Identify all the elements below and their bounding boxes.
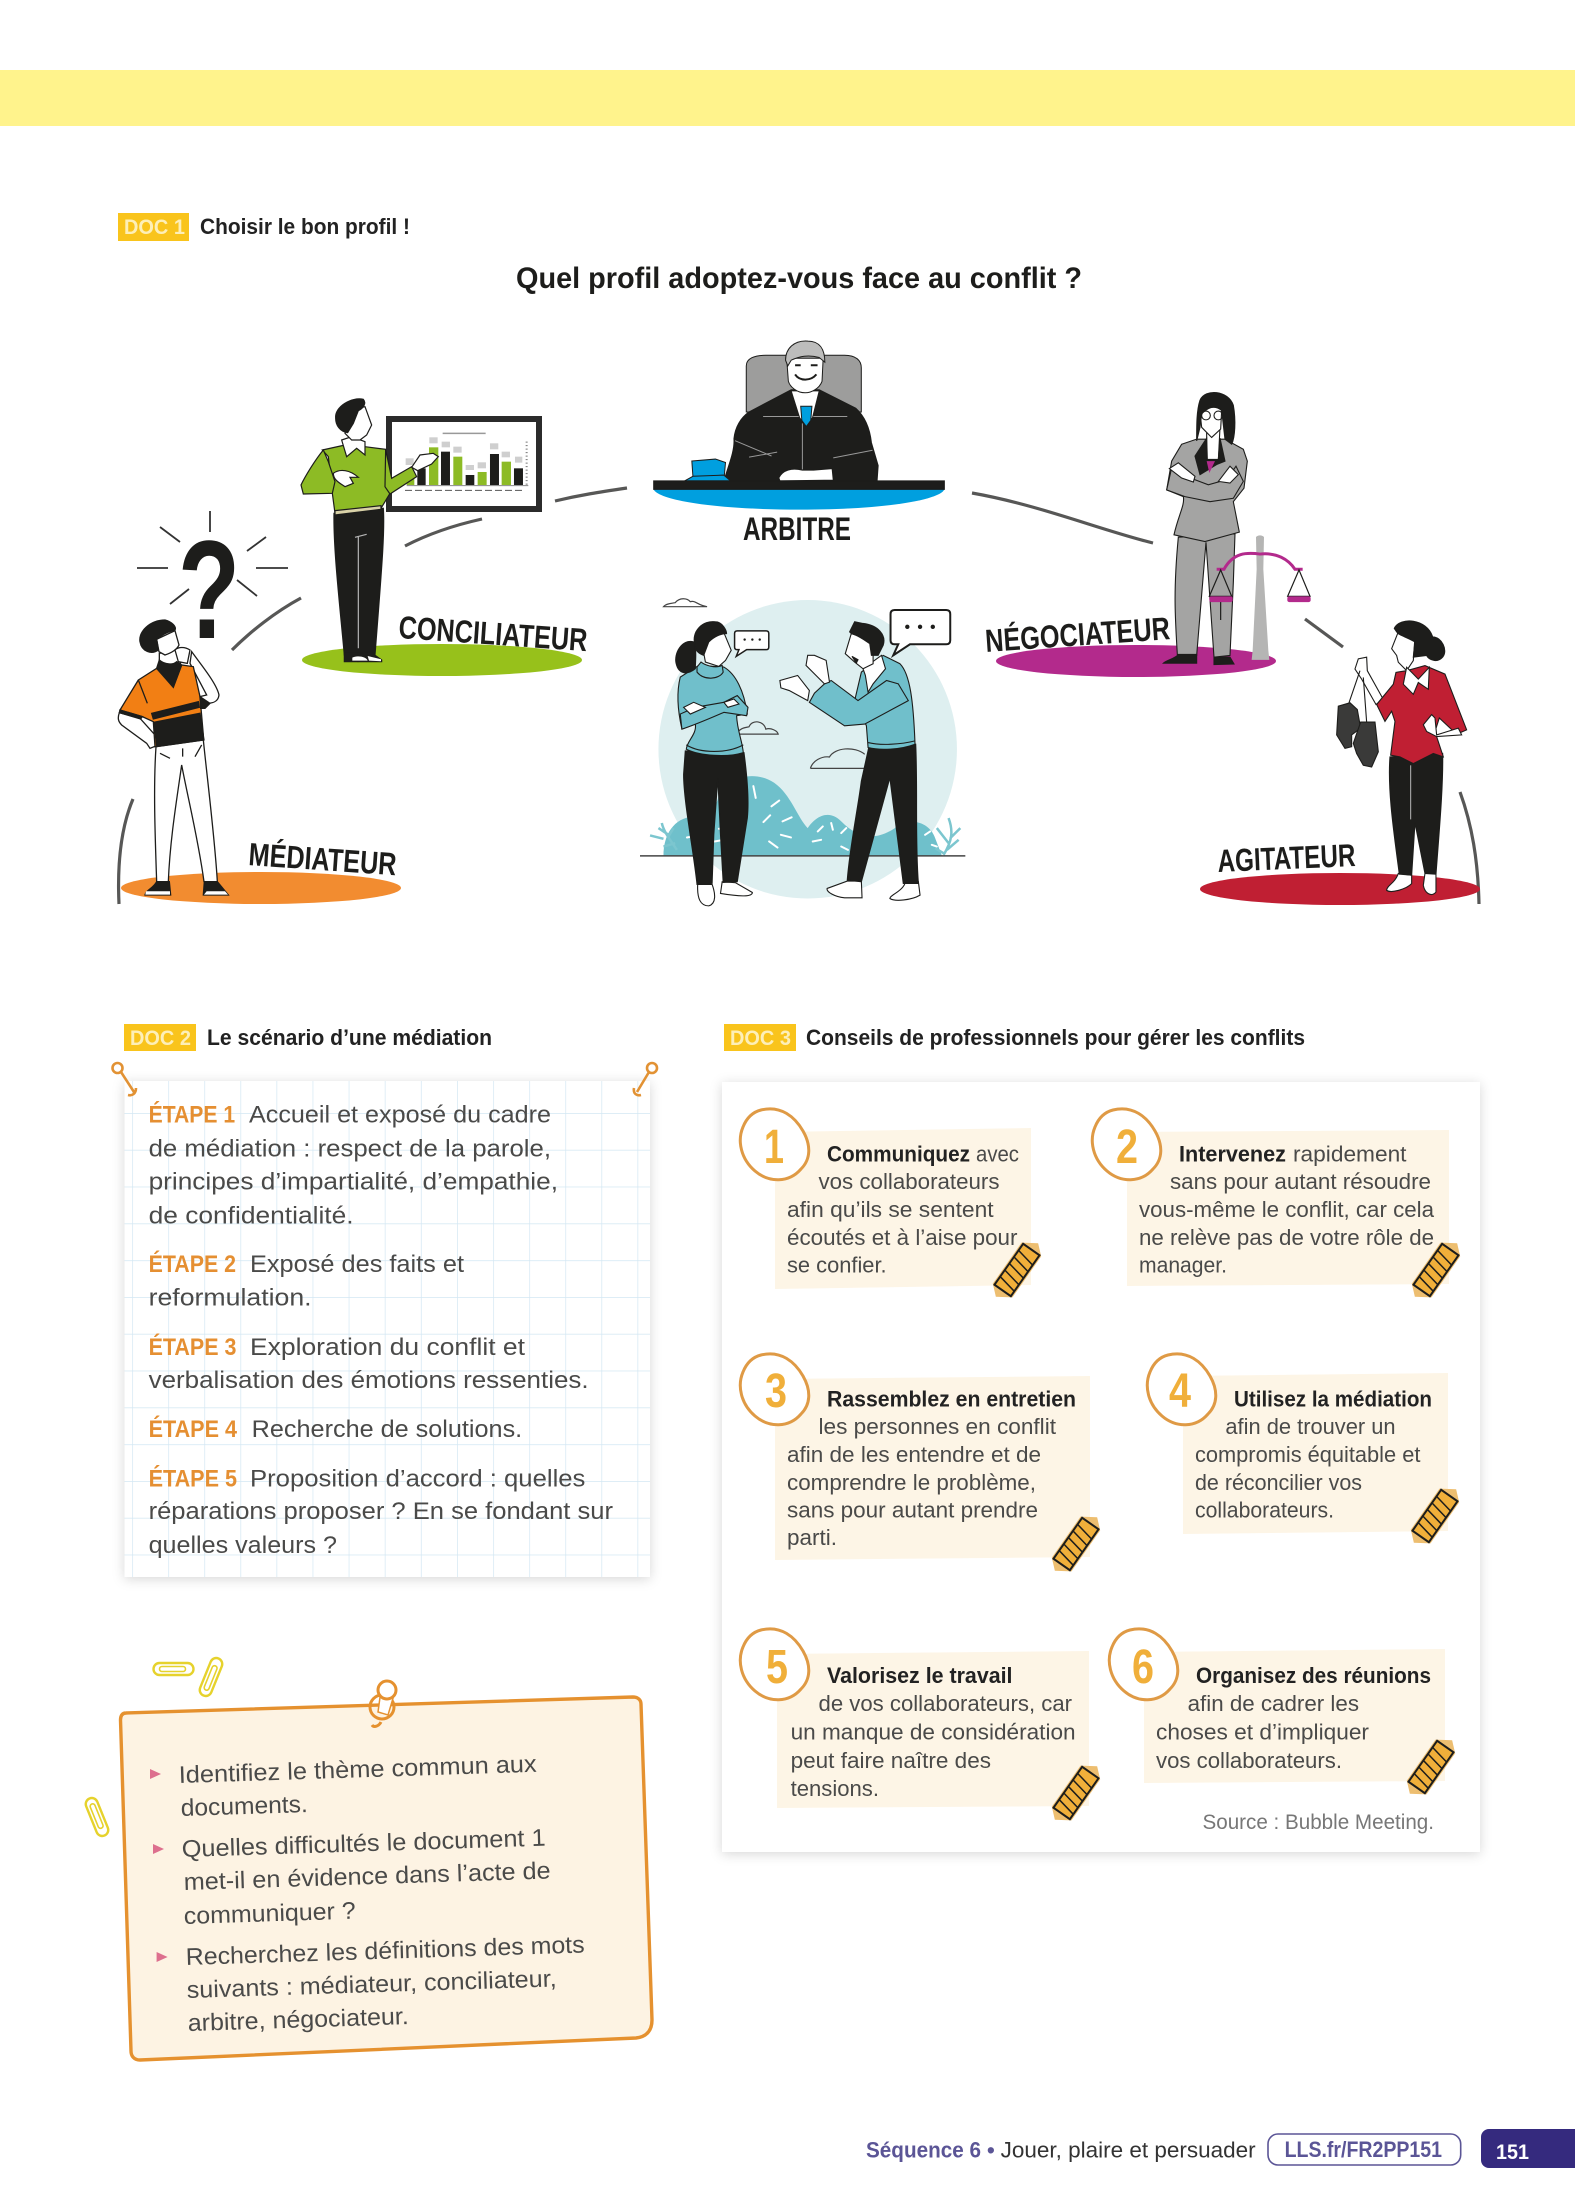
page number tab [1481, 2129, 1575, 2168]
bullets [150, 1769, 168, 1962]
étape 5: ÉTAPE 5 [149, 1465, 237, 1493]
conseil 4: 4 [1169, 1365, 1191, 1418]
doc 3 heading: Conseils de professionnels pour gérer les conflits [806, 1025, 1305, 1050]
question 1: documents. [180, 1791, 308, 1822]
conseil 4: Utilisez la médiation [1234, 1387, 1432, 1412]
question 3: suivants : médiateur, conciliateur, [186, 1965, 557, 2004]
woman with boxing gloves [1337, 621, 1467, 894]
man gesturing [780, 622, 920, 900]
conseil 2: ne relève pas de votre rôle de [1139, 1225, 1434, 1250]
label: arbitre: ARBITRE [743, 511, 851, 547]
magenta ellipse [996, 645, 1276, 677]
étape 3: ÉTAPE 3 [149, 1333, 236, 1361]
ground line [640, 855, 965, 857]
doc 2 heading: Le scénario d’une médiation [207, 1025, 492, 1050]
conseil 5: 5 [766, 1641, 788, 1694]
conseil 3: les personnes en conflit [818, 1414, 1056, 1439]
pin right [634, 1063, 657, 1095]
page number tab: 151 [1496, 2141, 1529, 2164]
conseil 3: Rassemblez en entretien [827, 1387, 1076, 1412]
conseil 5 [740, 1629, 1105, 1828]
étape 4: ÉTAPE 4 [149, 1415, 238, 1443]
woman with crossed arms [676, 622, 752, 906]
connecting arc lines [119, 488, 1479, 904]
étape 5: réparations proposer ? En se fondant sur [149, 1498, 613, 1525]
title: Quel profil adoptez-vous face au conflit ? [516, 262, 1082, 295]
question 2 [181, 1825, 551, 1930]
conseil 6: choses et d’impliquer [1156, 1720, 1369, 1744]
question 3: arbitre, négociateur. [187, 2003, 409, 2037]
conseil 4: collaborateurs. [1195, 1498, 1334, 1523]
label: négociateur: NÉGOCIATEUR [984, 610, 1171, 659]
conseil 2: vous-même le conflit, car cela [1139, 1197, 1435, 1222]
conseil 3: 3 [765, 1365, 787, 1418]
conseil 5: tensions. [791, 1776, 879, 1801]
conciliateur: figure [301, 399, 582, 676]
paperclips [84, 1656, 224, 1838]
conseil 4 [1147, 1354, 1464, 1551]
leaf sprigs [650, 818, 960, 855]
conseil 6: Organisez des réunions [1196, 1663, 1431, 1688]
pin left [112, 1063, 136, 1095]
source: Source : Bubble Meeting. [1202, 1811, 1434, 1834]
doc 2 heading: DOC 2 [130, 1027, 191, 1050]
conseil 4: afin de trouver un [1225, 1414, 1396, 1439]
pale background circle [658, 600, 957, 899]
conseil 6 [1109, 1629, 1460, 1802]
man's speech bubble [891, 610, 950, 655]
étape 1 [149, 1101, 558, 1229]
panel: scénario grid paper [112, 1063, 657, 1577]
agitateur: figure [1200, 621, 1480, 905]
conseil 1: vos collaborateurs [818, 1169, 1000, 1194]
conseil 1: écoutés et à l’aise pour [787, 1225, 1018, 1250]
face [787, 358, 823, 393]
footer [866, 2129, 1575, 2168]
shirt and tie [791, 391, 819, 427]
étape 2: Exposé des faits et [250, 1251, 464, 1278]
étape 2: ÉTAPE 2 [149, 1250, 236, 1278]
doc 3 heading: DOC 3 [730, 1027, 791, 1050]
conseil 2 [1092, 1109, 1465, 1305]
étape 5: quelles valeurs ? [149, 1532, 337, 1559]
gavel [692, 459, 726, 477]
conseil 4: compromis équitable et [1195, 1442, 1420, 1467]
conseil 4: de réconcilier vos [1195, 1470, 1362, 1495]
étape 1: Accueil et exposé du cadre [249, 1102, 551, 1129]
question 3: Recherchez les définitions des mots [185, 1931, 585, 1971]
blue half ellipse [654, 489, 944, 510]
conseil 1: avec [976, 1142, 1019, 1167]
médiateur: figure [118, 511, 401, 904]
conseil 3: afin de les entendre et de [787, 1442, 1041, 1467]
link pill: LLS.fr/FR2PP151 [1285, 2137, 1442, 2162]
conseil 1 [740, 1109, 1046, 1305]
doc 1 heading: DOC 1 [124, 216, 185, 239]
bushes [663, 776, 942, 856]
presentation board [389, 419, 539, 509]
conseil 2: rapidement [1293, 1142, 1406, 1167]
footer sequence text: • [987, 2138, 995, 2162]
conseil 3: sans pour autant prendre [787, 1498, 1038, 1523]
conseil 1: Communiquez [827, 1142, 970, 1167]
leaf details [687, 786, 937, 850]
note background [120, 1697, 652, 2060]
question 2: communiquer ? [183, 1898, 356, 1930]
black desk [654, 481, 944, 489]
person presenting [301, 399, 438, 662]
scales of justice [1209, 535, 1311, 660]
woman in grey suit [1163, 393, 1247, 665]
red ellipse [1200, 873, 1480, 905]
étape 1: ÉTAPE 1 [149, 1101, 235, 1129]
conseil 2: Intervenez [1179, 1142, 1286, 1167]
yellow header band [0, 70, 1575, 126]
person thinking [118, 620, 228, 895]
green ellipse [302, 644, 582, 676]
scene: two people discussing [640, 599, 965, 906]
panel: conseils [722, 1082, 1480, 1852]
conseil 2: sans pour autant résoudre [1170, 1169, 1431, 1194]
conseil 2: manager. [1139, 1253, 1227, 1278]
conseil 5: peut faire naître des [791, 1748, 991, 1773]
étape 5: Proposition d’accord : quelles [250, 1466, 585, 1493]
white card [722, 1082, 1480, 1852]
conseil 6: 6 [1132, 1641, 1154, 1694]
conseil 6: afin de cadrer les [1188, 1691, 1359, 1716]
question 3 [185, 1931, 585, 2037]
étape 3: verbalisation des émotions ressenties. [149, 1367, 589, 1394]
étape 5 [149, 1465, 613, 1559]
conseil 6: vos collaborateurs. [1156, 1748, 1342, 1773]
conseil 5: Valorisez le travail [827, 1663, 1012, 1688]
conseil 5: un manque de considération [791, 1720, 1076, 1744]
orange ellipse [121, 872, 401, 904]
woman's speech bubble [735, 631, 769, 656]
footer sequence text [866, 2138, 1256, 2162]
hair [786, 341, 825, 366]
question 2: met-il en évidence dans l’acte de [183, 1857, 551, 1896]
conseil 5: de vos collaborateurs, car [818, 1691, 1072, 1716]
grid sheet [124, 1081, 650, 1577]
conseil 3 [740, 1354, 1105, 1579]
étape 3: Exploration du conflit et [250, 1334, 525, 1361]
conseil 1: afin qu’ils se sentent [787, 1197, 994, 1222]
conseil 1: se confier. [787, 1253, 887, 1278]
label: agitateur: AGITATEUR [1217, 837, 1356, 879]
doc 1 heading [118, 213, 410, 241]
question 1: Identifiez le thème commun aux [178, 1751, 537, 1789]
question 2: Quelles difficultés le document 1 [181, 1825, 546, 1863]
étape 2 [149, 1250, 464, 1312]
doc 1 heading: Choisir le bon profil ! [200, 214, 410, 239]
chair [746, 355, 861, 412]
étape 3 [149, 1333, 589, 1394]
conseil 3: parti. [787, 1525, 837, 1550]
étape 2: reformulation. [149, 1285, 312, 1312]
conseil 3: comprendre le problème, [787, 1470, 1036, 1495]
pin [370, 1681, 396, 1726]
question 1 [178, 1751, 537, 1822]
label: conciliateur: CONCILIATEUR [398, 609, 589, 658]
arbitre: judge and desk [654, 341, 944, 510]
conseil 2: 2 [1116, 1121, 1138, 1174]
footer sequence text: Jouer, plaire et persuader [1001, 2138, 1256, 2162]
conseil 1: 1 [764, 1121, 784, 1174]
étape 1: principes d’impartialité, d’empathie, [149, 1169, 558, 1196]
rays around question mark [137, 511, 288, 604]
étape 4 [149, 1415, 522, 1443]
étape 1: de médiation : respect de la parole, [149, 1135, 551, 1162]
label: médiateur: MÉDIATEUR [248, 836, 398, 882]
négociateur: figure [996, 393, 1311, 677]
étape 1: de confidentialité. [149, 1202, 354, 1229]
footer sequence text: Séquence 6 [866, 2138, 981, 2162]
étape 4: Recherche de solutions. [252, 1416, 522, 1443]
hands [779, 469, 833, 481]
doc 2 heading [124, 1024, 492, 1051]
question mark: ? [178, 511, 240, 668]
clouds [663, 599, 865, 768]
panel: questions note [120, 1681, 652, 2060]
robe [724, 390, 878, 482]
